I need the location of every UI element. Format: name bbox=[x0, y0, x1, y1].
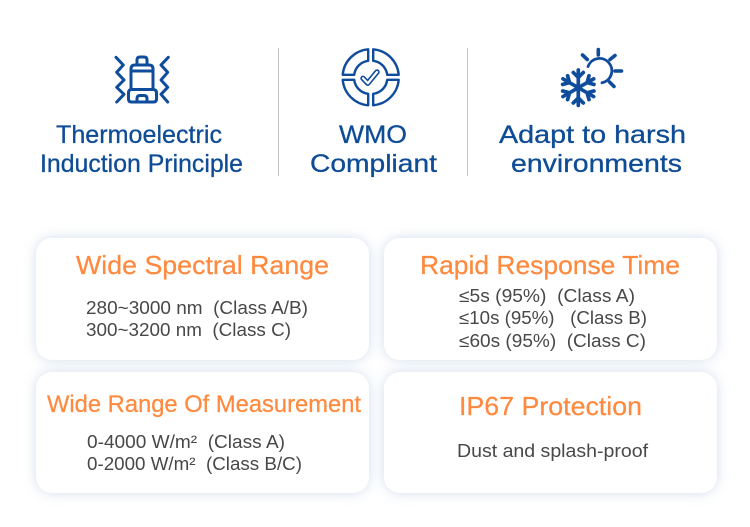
heading: Adapt to harsh environments: environments bbox=[511, 150, 682, 178]
text: response values: ≤60s (95%) (Class C) bbox=[459, 331, 646, 351]
sun bbox=[582, 50, 622, 86]
text: spectral values: 280~3000 nm (Class A/B) bbox=[86, 298, 308, 318]
icon: sun and snowflake bbox=[560, 50, 622, 105]
icon: thermoelectric sensor bbox=[116, 57, 168, 102]
feature: adapt to harsh environments bbox=[499, 50, 686, 178]
text: measurement values: 0-2000 W/m² (Class B/C) bbox=[87, 454, 302, 474]
snowflake bbox=[560, 70, 596, 105]
panel: IP67 protection bbox=[384, 372, 717, 493]
divider left bbox=[278, 48, 279, 176]
heading: WMO Compliant: WMO bbox=[339, 121, 407, 149]
title: IP67 protection: IP67 Protection bbox=[459, 391, 642, 421]
heading: WMO Compliant: Compliant bbox=[310, 150, 437, 178]
text: measurement values: 0-4000 W/m² (Class A) bbox=[87, 432, 285, 452]
feature: WMO compliant bbox=[310, 49, 437, 178]
heading: Thermoelectric Induction Principle bbox=[40, 121, 243, 178]
text: response values: ≤5s (95%) (Class A) bbox=[459, 286, 635, 306]
divider right bbox=[467, 48, 468, 176]
heading: Thermoelectric Induction Principle: Thermoelectric bbox=[56, 121, 222, 149]
text: measurement values bbox=[87, 432, 302, 474]
text: response values bbox=[459, 286, 647, 351]
text: dust and splash-proof: Dust and splash-proof bbox=[457, 441, 649, 461]
panel: wide range of measurement bbox=[36, 372, 369, 493]
heading: Adapt to harsh environments: Adapt to harsh bbox=[499, 121, 686, 149]
text: spectral values: 300~3200 nm (Class C) bbox=[86, 320, 291, 340]
feature: thermoelectric induction principle bbox=[40, 57, 243, 178]
heading: WMO Compliant bbox=[310, 121, 437, 178]
title: rapid response time: Rapid Response Time bbox=[420, 250, 680, 280]
icon: WMO check badge bbox=[343, 49, 399, 105]
text: response values: ≤10s (95%) (Class B) bbox=[459, 308, 647, 328]
panel: wide spectral range bbox=[36, 238, 369, 360]
heading: Thermoelectric Induction Principle: Induction Principle bbox=[40, 150, 243, 178]
title: wide spectral range: Wide Spectral Range bbox=[76, 250, 329, 280]
title: wide range of measurement: Wide Range Of Measurement bbox=[47, 391, 361, 418]
text: spectral values bbox=[86, 298, 308, 340]
heading: Adapt to harsh environments bbox=[499, 121, 686, 178]
panel: rapid response time bbox=[384, 238, 717, 360]
